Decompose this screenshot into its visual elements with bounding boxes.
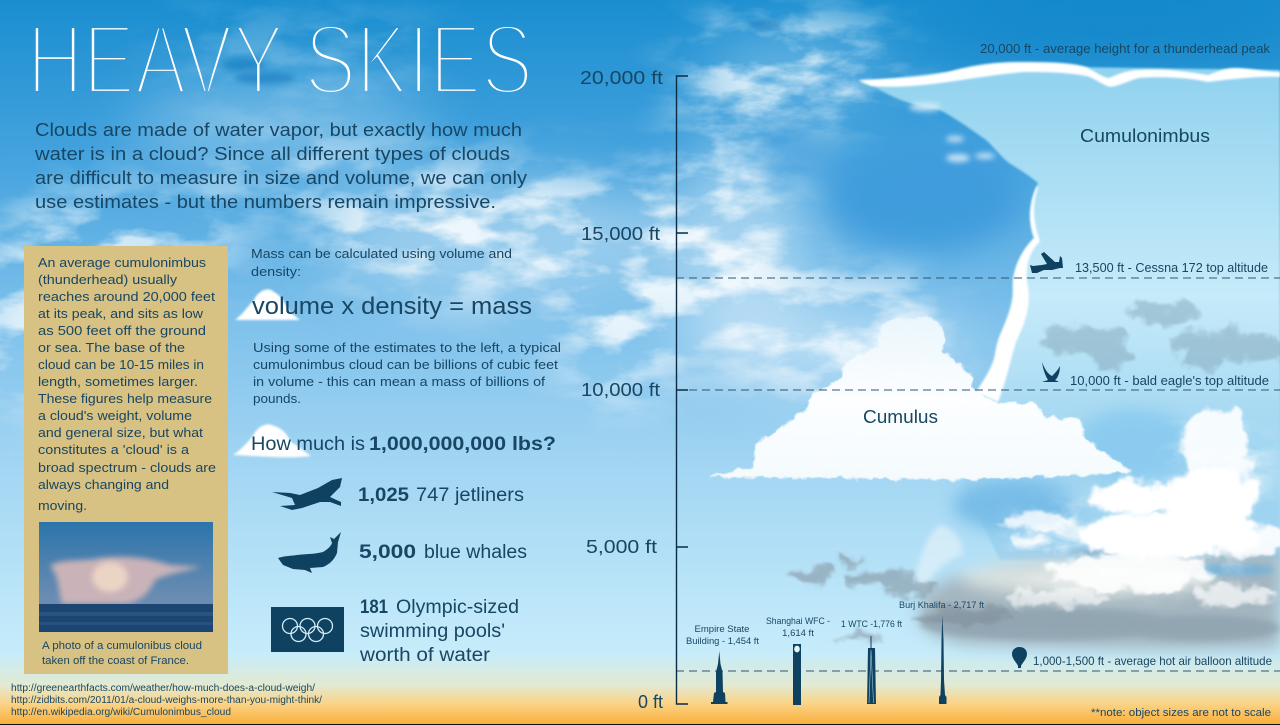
icon: olympic rings xyxy=(271,607,344,652)
facts text xyxy=(38,255,216,513)
intro paragraph xyxy=(34,119,528,212)
icon: eagle xyxy=(1042,362,1060,382)
intro paragraph: Clouds are made of water vapor, but exactly how much xyxy=(35,119,522,140)
icon: jetliner xyxy=(272,478,342,510)
building: Burj Khalifa: Burj Khalifa - 2,717 ft xyxy=(899,600,984,611)
panel: cumulonimbus facts xyxy=(24,246,228,674)
pools label: swimming pools' xyxy=(360,621,505,642)
mass paragraph xyxy=(253,340,561,406)
wisps at cloud edge xyxy=(909,103,995,162)
thunderhead anvil top xyxy=(858,62,1280,87)
axis labels: 10,000 ft xyxy=(581,379,660,400)
mass paragraph: pounds. xyxy=(253,391,301,406)
facts text: reaches around 20,000 feet xyxy=(38,289,215,304)
comparison: swimming pools xyxy=(271,597,519,666)
cloud labels xyxy=(863,126,1210,427)
facts text: and general size, but what xyxy=(38,425,203,440)
source links: http://zidbits.com/2011/01/a-cloud-weighs-more-than-you-might-think/ xyxy=(11,695,322,706)
mass explanation xyxy=(251,246,512,279)
icon: small plane xyxy=(1030,252,1063,273)
axis labels: 5,000 ft xyxy=(586,536,657,557)
mass paragraph: cumulonimbus cloud can be billions of cubic feet xyxy=(253,357,558,372)
building: 1 WTC: 1 WTC -1,776 ft xyxy=(841,619,902,630)
facts text: These figures help measure xyxy=(38,391,212,406)
photo: cumulonimbus off France xyxy=(39,522,213,632)
icon: balloon xyxy=(1012,647,1027,668)
facts text: cloud can be 10-15 miles in xyxy=(38,357,204,372)
mass explanation: Mass can be calculated using volume and xyxy=(251,246,512,261)
Cessna label: 13,500 ft - Cessna 172 top altitude xyxy=(1075,261,1268,275)
eagle label: 10,000 ft - bald eagle's top altitude xyxy=(1070,374,1269,388)
building: Empire State: Empire State xyxy=(695,624,749,635)
source links: http://greenearthfacts.com/weather/how-much-does-a-cloud-weigh/ xyxy=(11,683,315,694)
building: 1 WTC xyxy=(841,619,902,704)
altitude reference lines xyxy=(676,278,1280,671)
facts text: broad spectrum - clouds are xyxy=(38,460,216,475)
balloon label: 1,000-1,500 ft - average hot air balloon altitude xyxy=(1033,654,1272,668)
photo caption xyxy=(42,640,202,667)
intro paragraph: use estimates - but the numbers remain impressive. xyxy=(35,191,496,212)
marker: hot air balloon xyxy=(1012,647,1272,668)
cumulus cloud xyxy=(707,318,1132,480)
intro paragraph: are difficult to measure in size and volume, we can only xyxy=(35,167,528,188)
scale note: **note: object sizes are not to scale xyxy=(1091,707,1271,719)
marker: Cessna xyxy=(1030,252,1268,275)
mass paragraph: in volume - this can mean a mass of billions of xyxy=(253,374,545,389)
cloud labels: Cumulus xyxy=(863,407,938,427)
facts text: or sea. The base of the xyxy=(38,340,185,355)
marker: bald eagle xyxy=(1042,362,1269,388)
jetliners label xyxy=(358,485,524,506)
building: Shanghai WFC: Shanghai WFC - xyxy=(766,616,830,627)
axis labels: 15,000 ft xyxy=(581,223,660,244)
jetliners label: 747 jetliners xyxy=(416,485,524,506)
building: Burj Khalifa xyxy=(899,600,984,704)
grey shadow clouds upper right xyxy=(1043,303,1280,369)
cumulonimbus cloud xyxy=(858,62,1280,560)
mass explanation: density: xyxy=(251,264,301,279)
axis labels xyxy=(580,67,663,712)
whales label: blue whales xyxy=(424,542,527,563)
facts text: a cloud's weight, volume xyxy=(38,408,192,423)
pools label xyxy=(359,597,519,666)
building: Shanghai WFC xyxy=(766,616,830,705)
bottom edge xyxy=(0,724,1280,725)
altitude axis xyxy=(580,67,688,712)
facts text: always changing and xyxy=(38,477,169,492)
pools label: worth of water xyxy=(359,645,491,666)
pools label: 181 xyxy=(360,597,388,618)
facts text: at its peak, and sits as low xyxy=(38,306,204,321)
icon: small cloud behind formula xyxy=(235,289,300,320)
facts text: (thunderhead) usually xyxy=(38,272,177,287)
whales label: 5,000 xyxy=(359,542,416,563)
mass paragraph: Using some of the estimates to the left, a typical xyxy=(253,340,561,355)
thunderhead billow edge xyxy=(976,186,1040,402)
facts text: length, sometimes larger. xyxy=(38,374,198,389)
title: HEAVY SKIES xyxy=(27,4,533,116)
building: Empire State: Building - 1,454 ft xyxy=(686,636,759,647)
question heading: How much is xyxy=(251,434,365,455)
facts text: An average cumulonimbus xyxy=(38,255,206,270)
icon: small cloud behind question xyxy=(233,424,311,457)
intro paragraph: water is in a cloud? Since all different types of clouds xyxy=(34,143,510,164)
cloud labels: Cumulonimbus xyxy=(1080,126,1210,146)
axis labels: 20,000 ft xyxy=(580,67,663,88)
comparison: blue whales xyxy=(278,532,527,573)
icon: whale xyxy=(278,532,341,573)
comparison: jetliners xyxy=(272,478,524,510)
lower cloud bank xyxy=(784,405,1280,649)
building: Shanghai WFC: 1,614 ft xyxy=(782,628,814,639)
source links xyxy=(11,683,322,718)
pools label: Olympic-sized xyxy=(396,597,519,618)
photo caption: A photo of a cumulonibus cloud xyxy=(42,640,202,652)
source links: http://en.wikipedia.org/wiki/Cumulonimbus_cloud xyxy=(11,707,231,718)
building: Empire State xyxy=(686,624,759,704)
question heading: 1,000,000,000 lbs? xyxy=(369,434,556,455)
jetliners label: 1,025 xyxy=(358,485,409,506)
thunderhead peak label: 20,000 ft - average height for a thunderhead peak xyxy=(980,42,1271,56)
formula: volume x density = mass xyxy=(252,293,532,320)
facts text: moving. xyxy=(38,498,87,513)
axis labels: 0 ft xyxy=(638,691,663,712)
whales label xyxy=(359,542,527,563)
question heading xyxy=(251,434,556,455)
facts text: as 500 feet off the ground xyxy=(38,323,206,338)
facts text: constitutes a 'cloud' is a xyxy=(38,442,190,457)
photo caption: taken off the coast of France. xyxy=(42,655,189,667)
